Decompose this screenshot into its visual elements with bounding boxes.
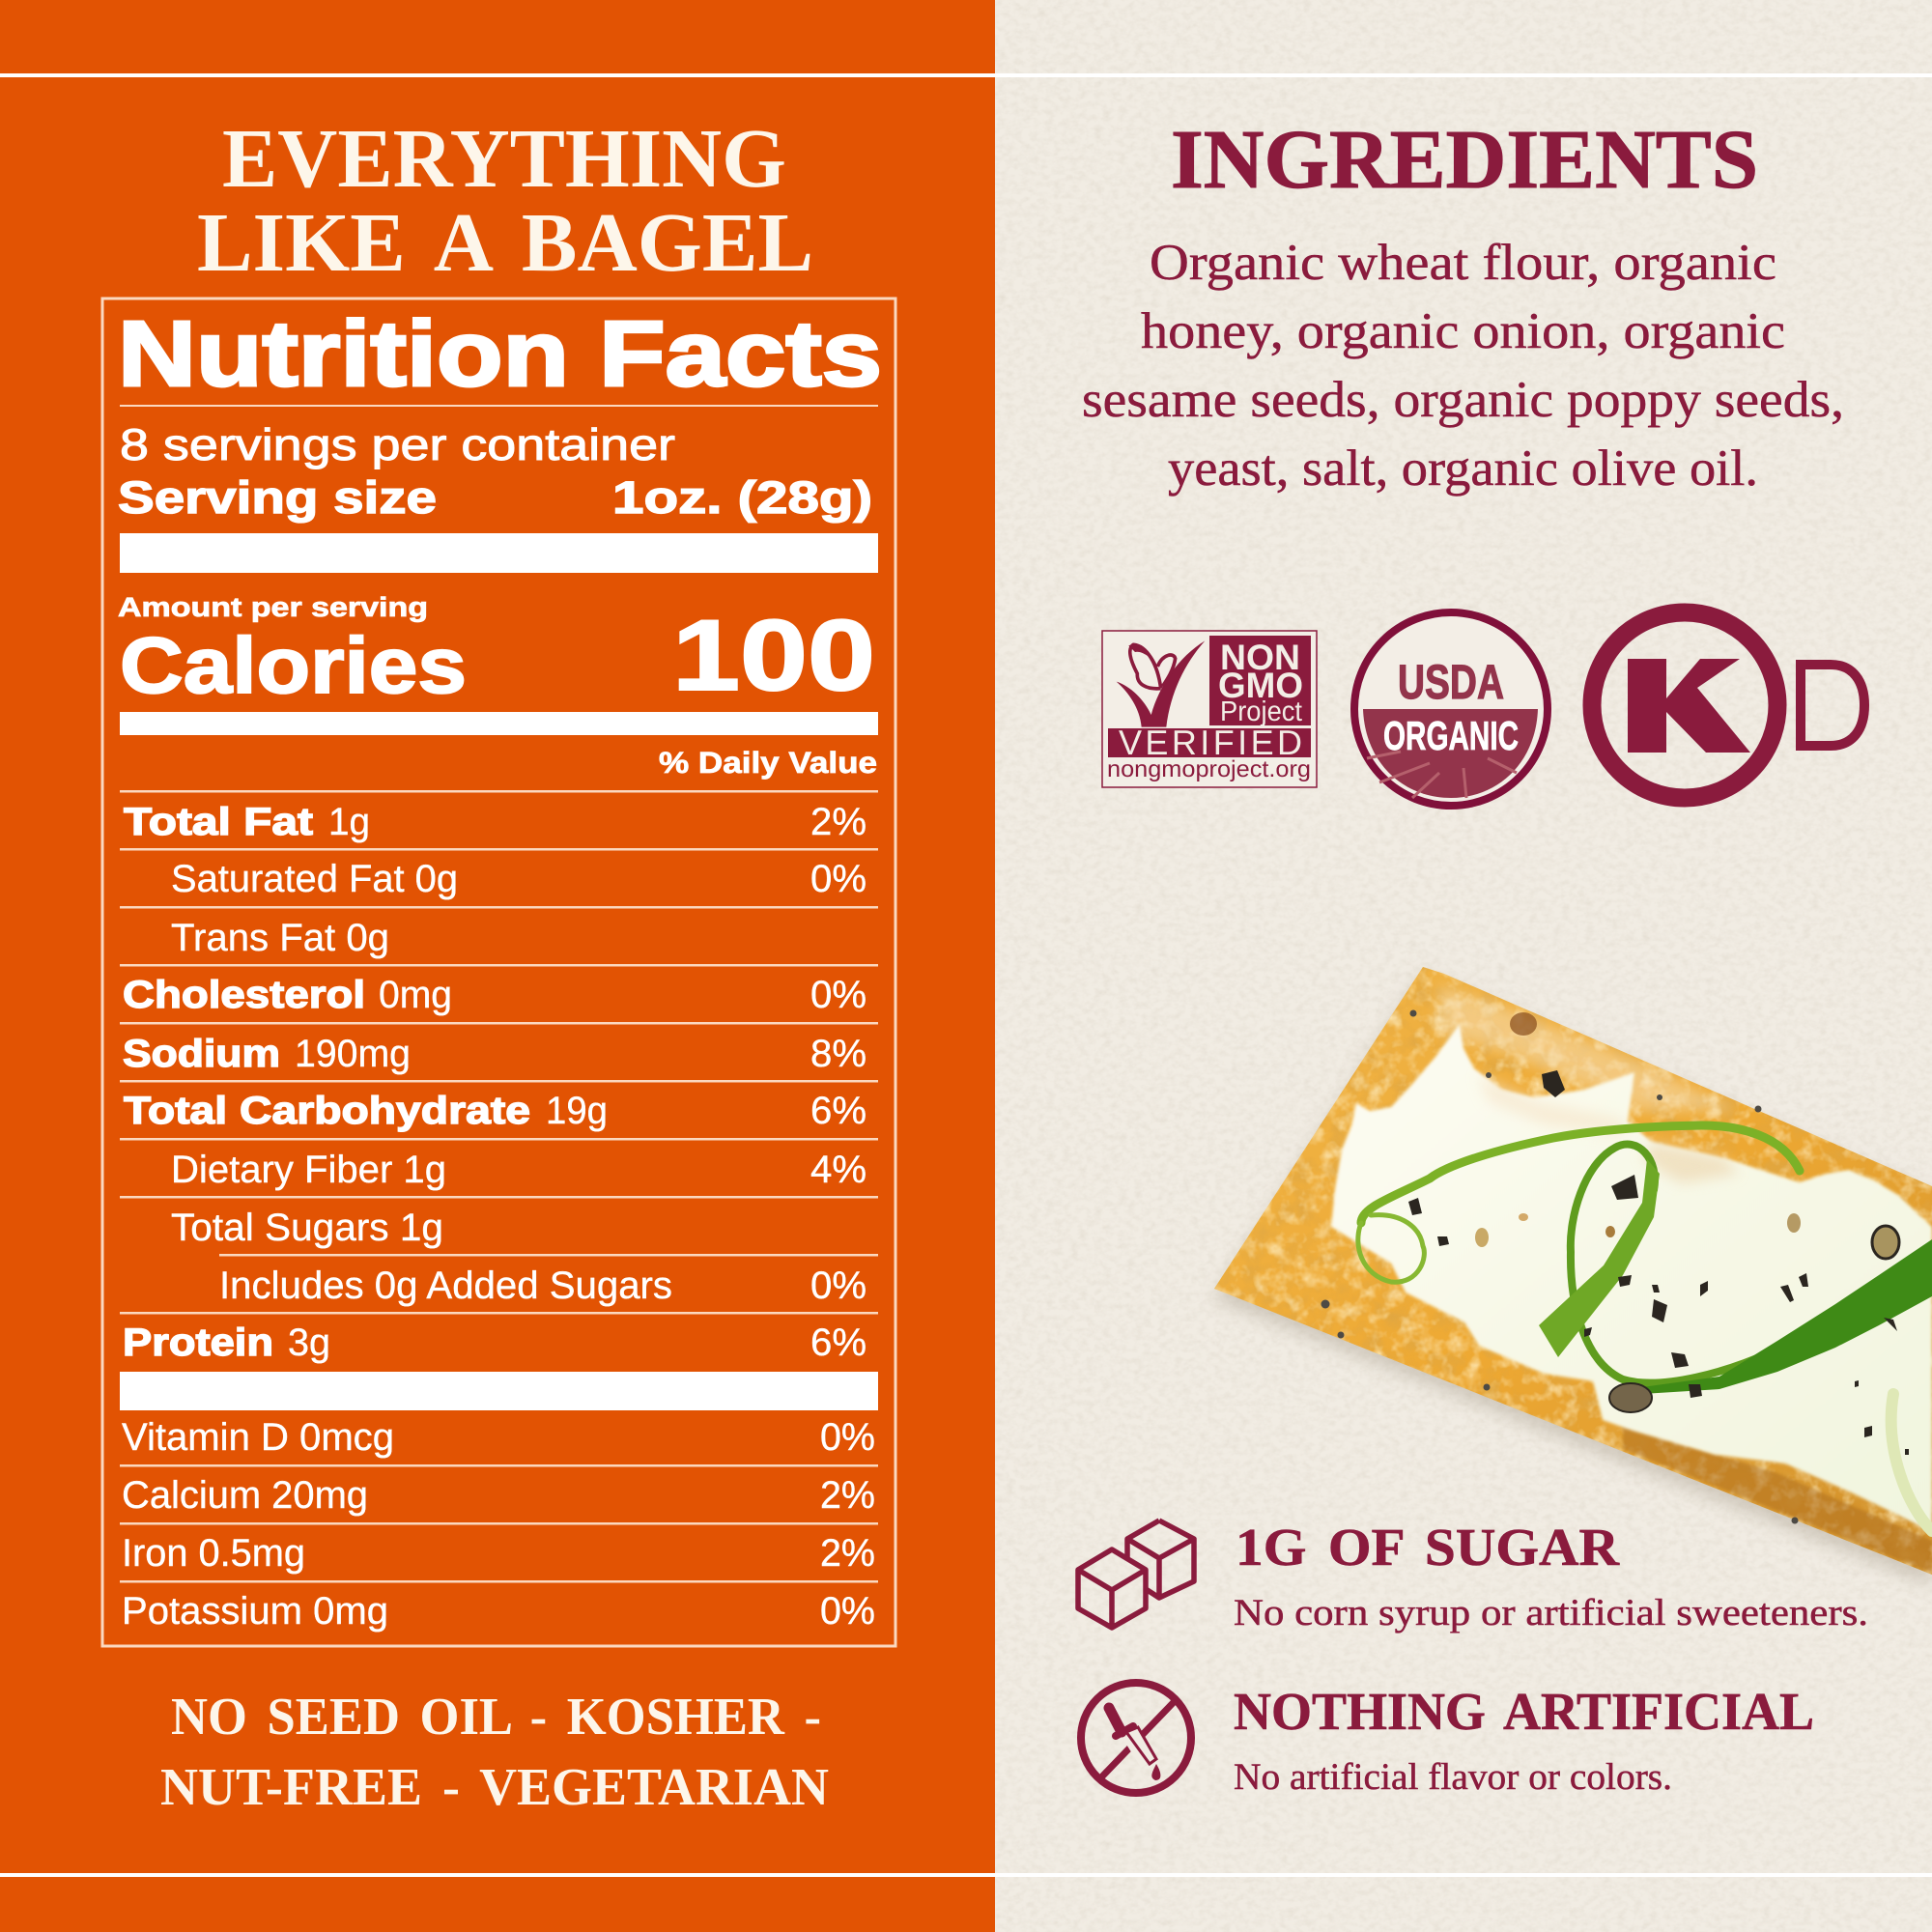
row: protein: 3g xyxy=(288,1321,330,1364)
cracker xyxy=(1208,966,1932,1584)
row: added sugars: Includes 0g Added Sugars xyxy=(219,1264,672,1307)
icon: plant and butterfly xyxy=(1117,640,1205,727)
row: saturated fat xyxy=(171,858,867,900)
row: protein: 6% xyxy=(810,1321,867,1364)
ingredients text: Organic wheat flour, organic xyxy=(1150,235,1776,291)
row: total fat: Total Fat xyxy=(124,801,313,843)
panel: nutrition background xyxy=(0,0,995,1932)
photo: cracker with cream cheese and green onion xyxy=(1208,966,1932,1586)
row: vitamin d xyxy=(122,1416,875,1459)
row: iron xyxy=(122,1532,875,1575)
row: potassium: Potassium 0mg xyxy=(122,1590,388,1633)
servings per container: 8 servings per container xyxy=(120,419,675,469)
row: protein xyxy=(123,1321,867,1364)
logo: non gmo project verified: VERIFIED xyxy=(1119,723,1302,762)
row: protein: Protein xyxy=(123,1321,273,1364)
claims text: NO SEED OIL - KOSHER - xyxy=(171,1687,821,1746)
nutrition facts label xyxy=(102,298,895,1646)
pepper specks xyxy=(1408,1070,1909,1455)
heading: 1g of sugar: 1G OF SUGAR xyxy=(1236,1518,1620,1577)
row: total fat: 2% xyxy=(810,801,867,843)
row: total carbohydrate xyxy=(124,1090,867,1132)
row: total carbohydrate: Total Carbohydrate xyxy=(124,1090,530,1132)
row: saturated fat: Saturated Fat 0g xyxy=(171,858,458,900)
row: sodium: Sodium xyxy=(123,1033,280,1075)
claims text xyxy=(160,1687,829,1816)
row: dietary fiber: 4% xyxy=(810,1149,867,1191)
peppercorns xyxy=(1475,1012,1899,1412)
serving size: Serving size xyxy=(118,471,437,523)
claims text: NUT-FREE - VEGETARIAN xyxy=(160,1757,829,1816)
daily value header: % Daily Value xyxy=(659,746,877,780)
row: dietary fiber: Dietary Fiber 1g xyxy=(171,1149,446,1191)
row: total fat: 1g xyxy=(328,801,370,843)
green onion blade xyxy=(1539,1159,1660,1357)
logo: non gmo project verified xyxy=(1102,631,1317,787)
row: total carbohydrate: 6% xyxy=(810,1090,867,1132)
green onion strands xyxy=(1358,1125,1932,1531)
logo: usda organic xyxy=(1354,612,1548,806)
description: artificial: No artificial flavor or colors. xyxy=(1234,1756,1672,1798)
feature: one gram of sugar xyxy=(1078,1518,1868,1634)
ingredients text xyxy=(1082,235,1844,497)
row: vitamin d: 0% xyxy=(820,1416,875,1459)
title: everything like a bagel xyxy=(197,111,813,289)
calories: Calories xyxy=(120,622,467,710)
cream cheese xyxy=(1331,1024,1932,1532)
row: trans fat: Trans Fat 0g xyxy=(171,917,389,959)
row: potassium: 0% xyxy=(820,1590,875,1633)
row: iron: 2% xyxy=(820,1532,875,1575)
title: everything like a bagel: EVERYTHING xyxy=(222,111,786,205)
description: sugar: No corn syrup or artificial sweeteners. xyxy=(1234,1592,1868,1634)
row: total carbohydrate: 19g xyxy=(546,1090,608,1132)
logo: non gmo project verified: nongmoproject.org xyxy=(1107,756,1311,782)
heading: nutrition facts: Nutrition Facts xyxy=(118,302,882,406)
panel: ingredients background xyxy=(995,0,1932,1932)
cracker shadow xyxy=(1214,974,1932,1586)
green onion thick band xyxy=(1642,1239,1932,1394)
calories: 100 xyxy=(672,600,875,712)
logo: non gmo project verified: NON xyxy=(1220,638,1300,677)
icon: crossed dropper xyxy=(1081,1683,1191,1793)
logo: non gmo project verified: GMO xyxy=(1218,666,1303,705)
logo: non gmo project verified: Project xyxy=(1220,696,1302,727)
row: sodium xyxy=(123,1033,867,1075)
row: calcium: 2% xyxy=(820,1474,875,1517)
row: dietary fiber xyxy=(171,1149,867,1191)
row: total sugars: Total Sugars 1g xyxy=(171,1207,443,1249)
ingredients text: honey, organic onion, organic xyxy=(1141,303,1785,359)
row: total fat xyxy=(124,801,867,843)
icon: sugar cubes xyxy=(1078,1520,1194,1628)
row: iron: Iron 0.5mg xyxy=(122,1532,305,1575)
row: calcium xyxy=(122,1474,875,1517)
logo: usda organic: ORGANIC xyxy=(1383,713,1519,758)
row: calcium: Calcium 20mg xyxy=(122,1474,368,1517)
row: cholesterol xyxy=(123,974,867,1016)
row: sodium: 190mg xyxy=(295,1033,411,1075)
amount per serving: Amount per serving xyxy=(118,592,428,622)
logo: kosher dairy xyxy=(1592,612,1864,798)
calories xyxy=(120,600,875,712)
row: sodium: 8% xyxy=(810,1033,867,1075)
row: potassium xyxy=(122,1590,875,1633)
serving size xyxy=(118,471,872,523)
logo: usda organic: USDA xyxy=(1398,655,1504,709)
heading: ingredients: INGREDIENTS xyxy=(1171,112,1758,206)
title: everything like a bagel: LIKE A BAGEL xyxy=(197,195,813,289)
serving size: 1oz. (28g) xyxy=(612,471,872,523)
row: cholesterol: 0mg xyxy=(379,974,452,1016)
row: added sugars xyxy=(219,1264,867,1307)
row: cholesterol: 0% xyxy=(810,974,867,1016)
feature: nothing artificial xyxy=(1081,1682,1814,1798)
row: vitamin d: Vitamin D 0mcg xyxy=(122,1416,394,1459)
row: cholesterol: Cholesterol xyxy=(123,974,365,1016)
row: added sugars: 0% xyxy=(810,1264,867,1307)
poppy seeds xyxy=(1321,1010,1799,1524)
ingredients text: sesame seeds, organic poppy seeds, xyxy=(1082,372,1844,428)
heading: nothing artificial: NOTHING ARTIFICIAL xyxy=(1234,1682,1814,1741)
ingredients text: yeast, salt, organic olive oil. xyxy=(1168,440,1758,497)
row: saturated fat: 0% xyxy=(810,858,867,900)
